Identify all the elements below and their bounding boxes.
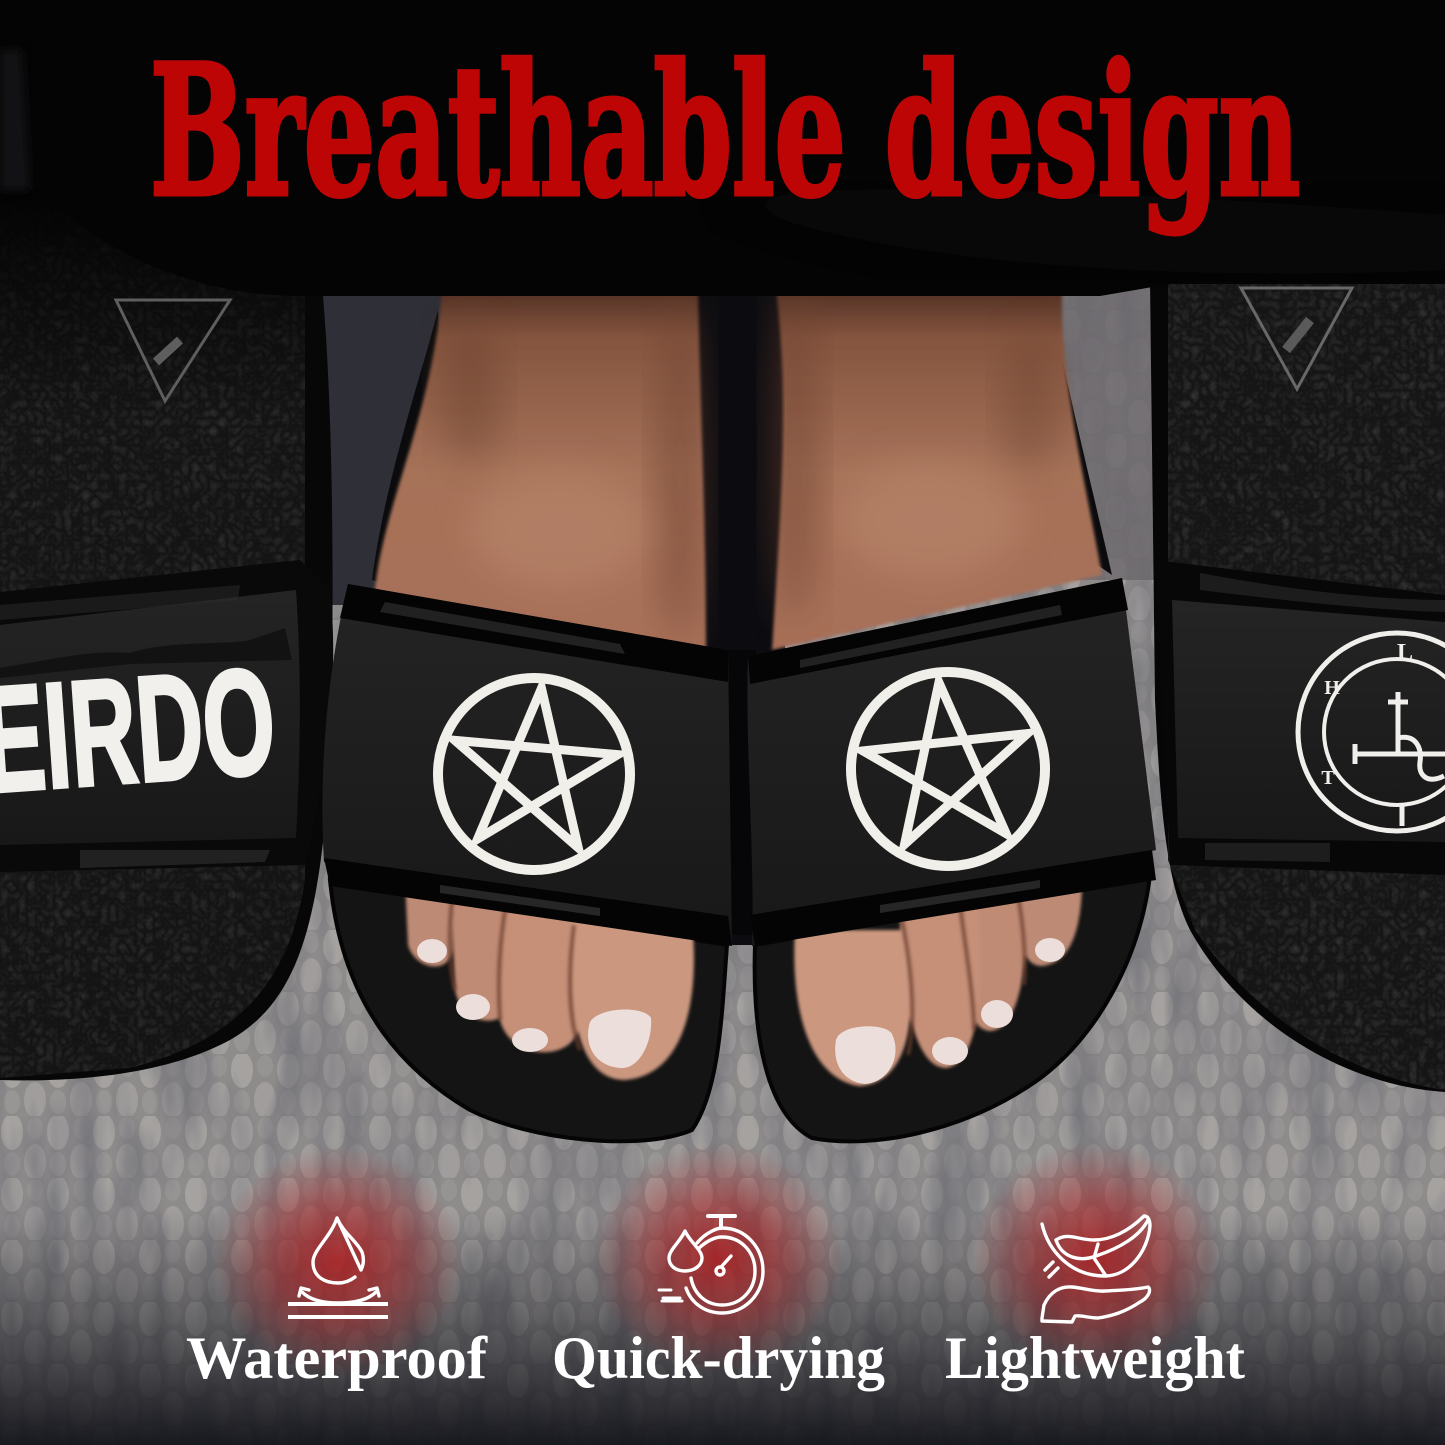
toenails: left foot	[417, 939, 651, 1068]
left foot	[374, 290, 706, 1080]
right slipper strap with sigil	[1155, 560, 1445, 875]
feature: lightweight	[945, 1216, 1245, 1391]
label: Waterproof: Waterproof	[186, 1325, 488, 1391]
slide back edges	[372, 310, 1112, 590]
left foot strap with pentagram	[322, 584, 732, 946]
feature: quick-drying	[552, 1216, 885, 1391]
toes: right foot	[794, 880, 1082, 1086]
left slipper footbed	[0, 190, 333, 1080]
right foot sole	[755, 875, 1150, 1141]
black cloth header	[0, 0, 1445, 296]
red glows behind icons	[213, 1143, 1221, 1377]
icon: Lilith sigil: L	[1397, 640, 1413, 666]
gap between the straps	[722, 650, 756, 935]
label: Lightweight: Lightweight	[945, 1325, 1245, 1391]
feature: waterproof	[186, 1218, 488, 1391]
icon: Lilith sigil: T	[1321, 767, 1335, 789]
icon: pentagram	[841, 662, 1055, 876]
icon: water drop over membrane	[288, 1218, 388, 1317]
icon: logo triangle right	[1241, 288, 1352, 389]
right foot strap with pentagram	[747, 578, 1156, 946]
toenails: right foot	[835, 938, 1065, 1084]
icon: pentagram	[430, 670, 638, 878]
icon: logo triangle left	[116, 300, 230, 401]
right foot	[771, 280, 1102, 1086]
icon: slipper above hand	[1042, 1216, 1150, 1322]
label: Quick-drying: Quick-drying	[552, 1325, 885, 1391]
left slipper strap with WEIRDO text	[0, 560, 333, 872]
toes: left foot	[405, 880, 694, 1080]
icon: Lilith sigil	[1298, 633, 1445, 831]
left foot sole	[330, 880, 727, 1141]
icon: stopwatch with drop	[659, 1216, 763, 1313]
right slipper footbed	[1150, 280, 1445, 1092]
icon: Lilith sigil: H	[1324, 677, 1340, 699]
